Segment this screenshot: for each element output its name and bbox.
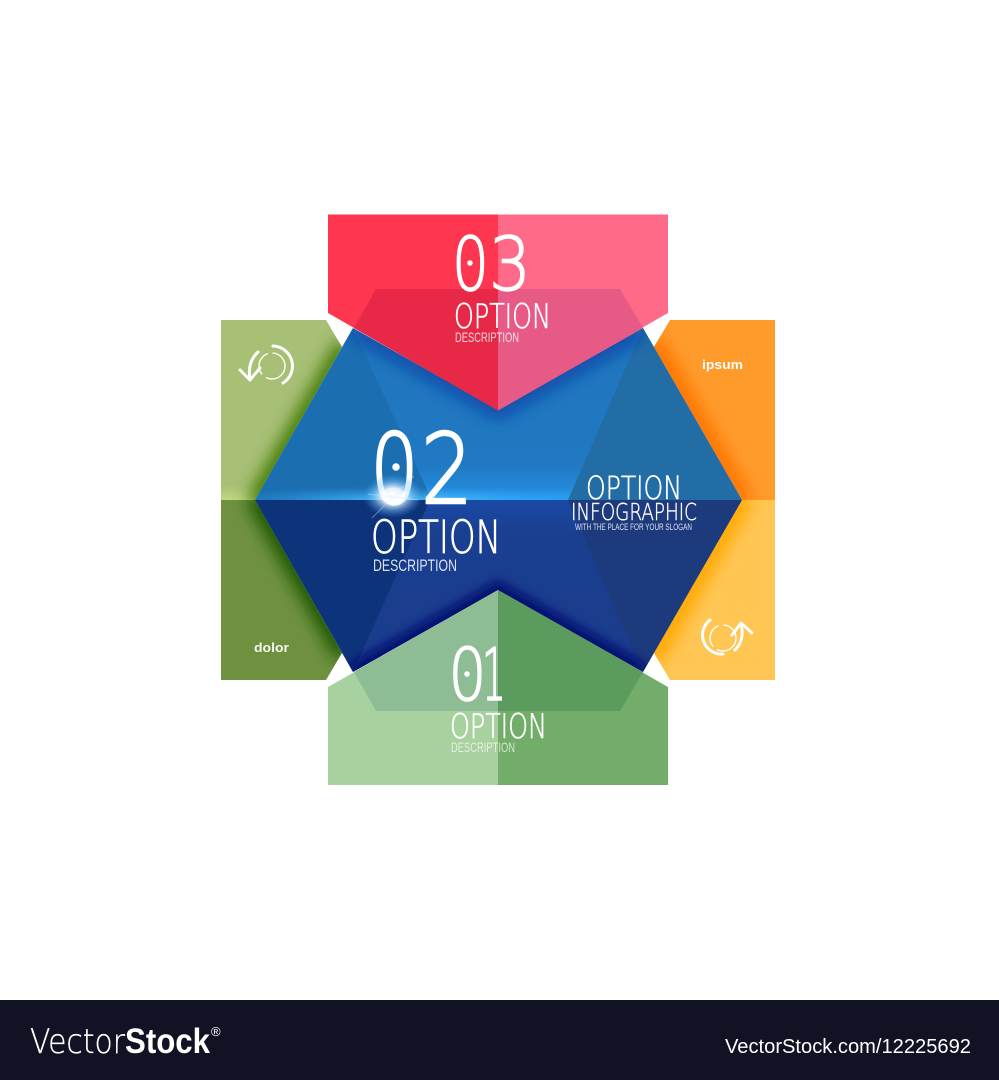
number 02: 0 <box>370 413 418 526</box>
footer url: VectorStock.com/12225692 <box>725 1036 971 1058</box>
icon: clockwise arrow <box>703 620 752 654</box>
panel: central blue hexagon upper <box>255 328 742 500</box>
footer logo: ® <box>211 1024 221 1039</box>
panel: left green lower <box>221 495 346 680</box>
number 01: 1 <box>482 633 506 717</box>
glow highlight <box>363 474 423 518</box>
number 03: 0 <box>452 222 489 308</box>
panel: yellow lower <box>650 495 775 680</box>
text: option 02: OPTION <box>371 511 501 564</box>
text: description 03: DESCRIPTION <box>455 329 519 345</box>
label: ipsum: ipsum <box>702 357 743 372</box>
text: option infographic title: WITH THE PLACE FOR YOUR SLOGAN <box>575 522 692 533</box>
number 03: 3 <box>489 222 531 308</box>
footer bar <box>0 1000 999 1080</box>
panel: green bottom <box>328 590 668 785</box>
icon: counter-clockwise arrow <box>240 346 292 383</box>
number 01: 0 <box>448 633 486 717</box>
text: option infographic title: OPTION <box>586 469 682 507</box>
footer logo: Stock <box>125 1022 210 1061</box>
number 03 <box>452 222 531 308</box>
panel: central blue hexagon lower <box>250 500 745 675</box>
number 02 <box>370 413 473 526</box>
text: option infographic title <box>571 469 697 533</box>
number 02: 2 <box>421 413 473 526</box>
panel: left green upper <box>221 320 346 505</box>
footer logo <box>30 1022 221 1062</box>
panel: red top <box>328 214 668 410</box>
text: option infographic title: INFOGRAPHIC <box>571 500 697 526</box>
text: description 02: DESCRIPTION <box>373 556 457 575</box>
text: description 01: DESCRIPTION <box>451 739 515 755</box>
text: option 01: OPTION <box>450 707 547 747</box>
footer logo: Vector <box>30 1022 125 1062</box>
panel: orange upper <box>650 320 775 505</box>
label: dolor: dolor <box>254 640 289 655</box>
text: option 03: OPTION <box>454 297 551 337</box>
